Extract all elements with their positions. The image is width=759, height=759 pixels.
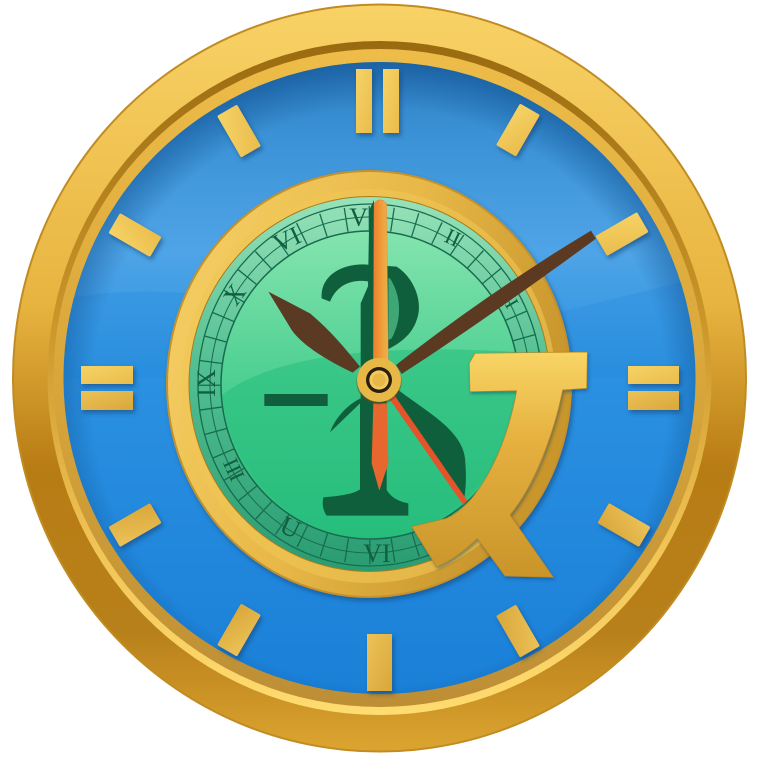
mark: 3 bbox=[628, 366, 679, 410]
numeral: upper right: II bbox=[441, 223, 465, 252]
minute hand bbox=[396, 231, 596, 374]
mark: 2 bbox=[595, 212, 649, 256]
second hand bbox=[386, 393, 467, 505]
hour hand bbox=[268, 292, 360, 373]
numeral: lower left: III bbox=[217, 455, 249, 485]
mark: 10 bbox=[108, 213, 162, 257]
mark: 4 bbox=[597, 503, 651, 547]
dollar symbol, hands and Q use reference zoom coordinates bbox=[264, 200, 596, 577]
orange vertical hand bbox=[367, 200, 388, 491]
gold Q letter bbox=[412, 352, 587, 577]
mark: 9 bbox=[81, 366, 133, 410]
numeral: right: I bbox=[500, 296, 522, 312]
center hub bbox=[356, 358, 402, 404]
numeral: bottom: VI bbox=[363, 539, 391, 568]
roman numerals bbox=[192, 203, 522, 568]
mark: 8 bbox=[108, 503, 162, 547]
mark: 7 bbox=[217, 603, 261, 657]
mark: 5 bbox=[496, 604, 540, 658]
inner gold ring bbox=[166, 170, 572, 598]
minus bar bbox=[264, 394, 328, 406]
mark: 6 bbox=[367, 634, 392, 691]
numeral: left: IX bbox=[192, 369, 221, 397]
green dial bbox=[188, 196, 550, 572]
mark: 1 bbox=[496, 103, 540, 157]
numeral: top: VI bbox=[349, 203, 377, 232]
numeral: lower: U bbox=[276, 510, 305, 545]
mark: 12 bbox=[356, 69, 399, 133]
mark: 11 bbox=[217, 104, 261, 158]
hour marks bbox=[81, 69, 679, 691]
dollar symbol bbox=[264, 264, 466, 516]
numeral: left upper: X bbox=[217, 279, 252, 311]
blue clock face bbox=[60, 62, 700, 694]
numeral: upper left: VI bbox=[268, 221, 305, 258]
